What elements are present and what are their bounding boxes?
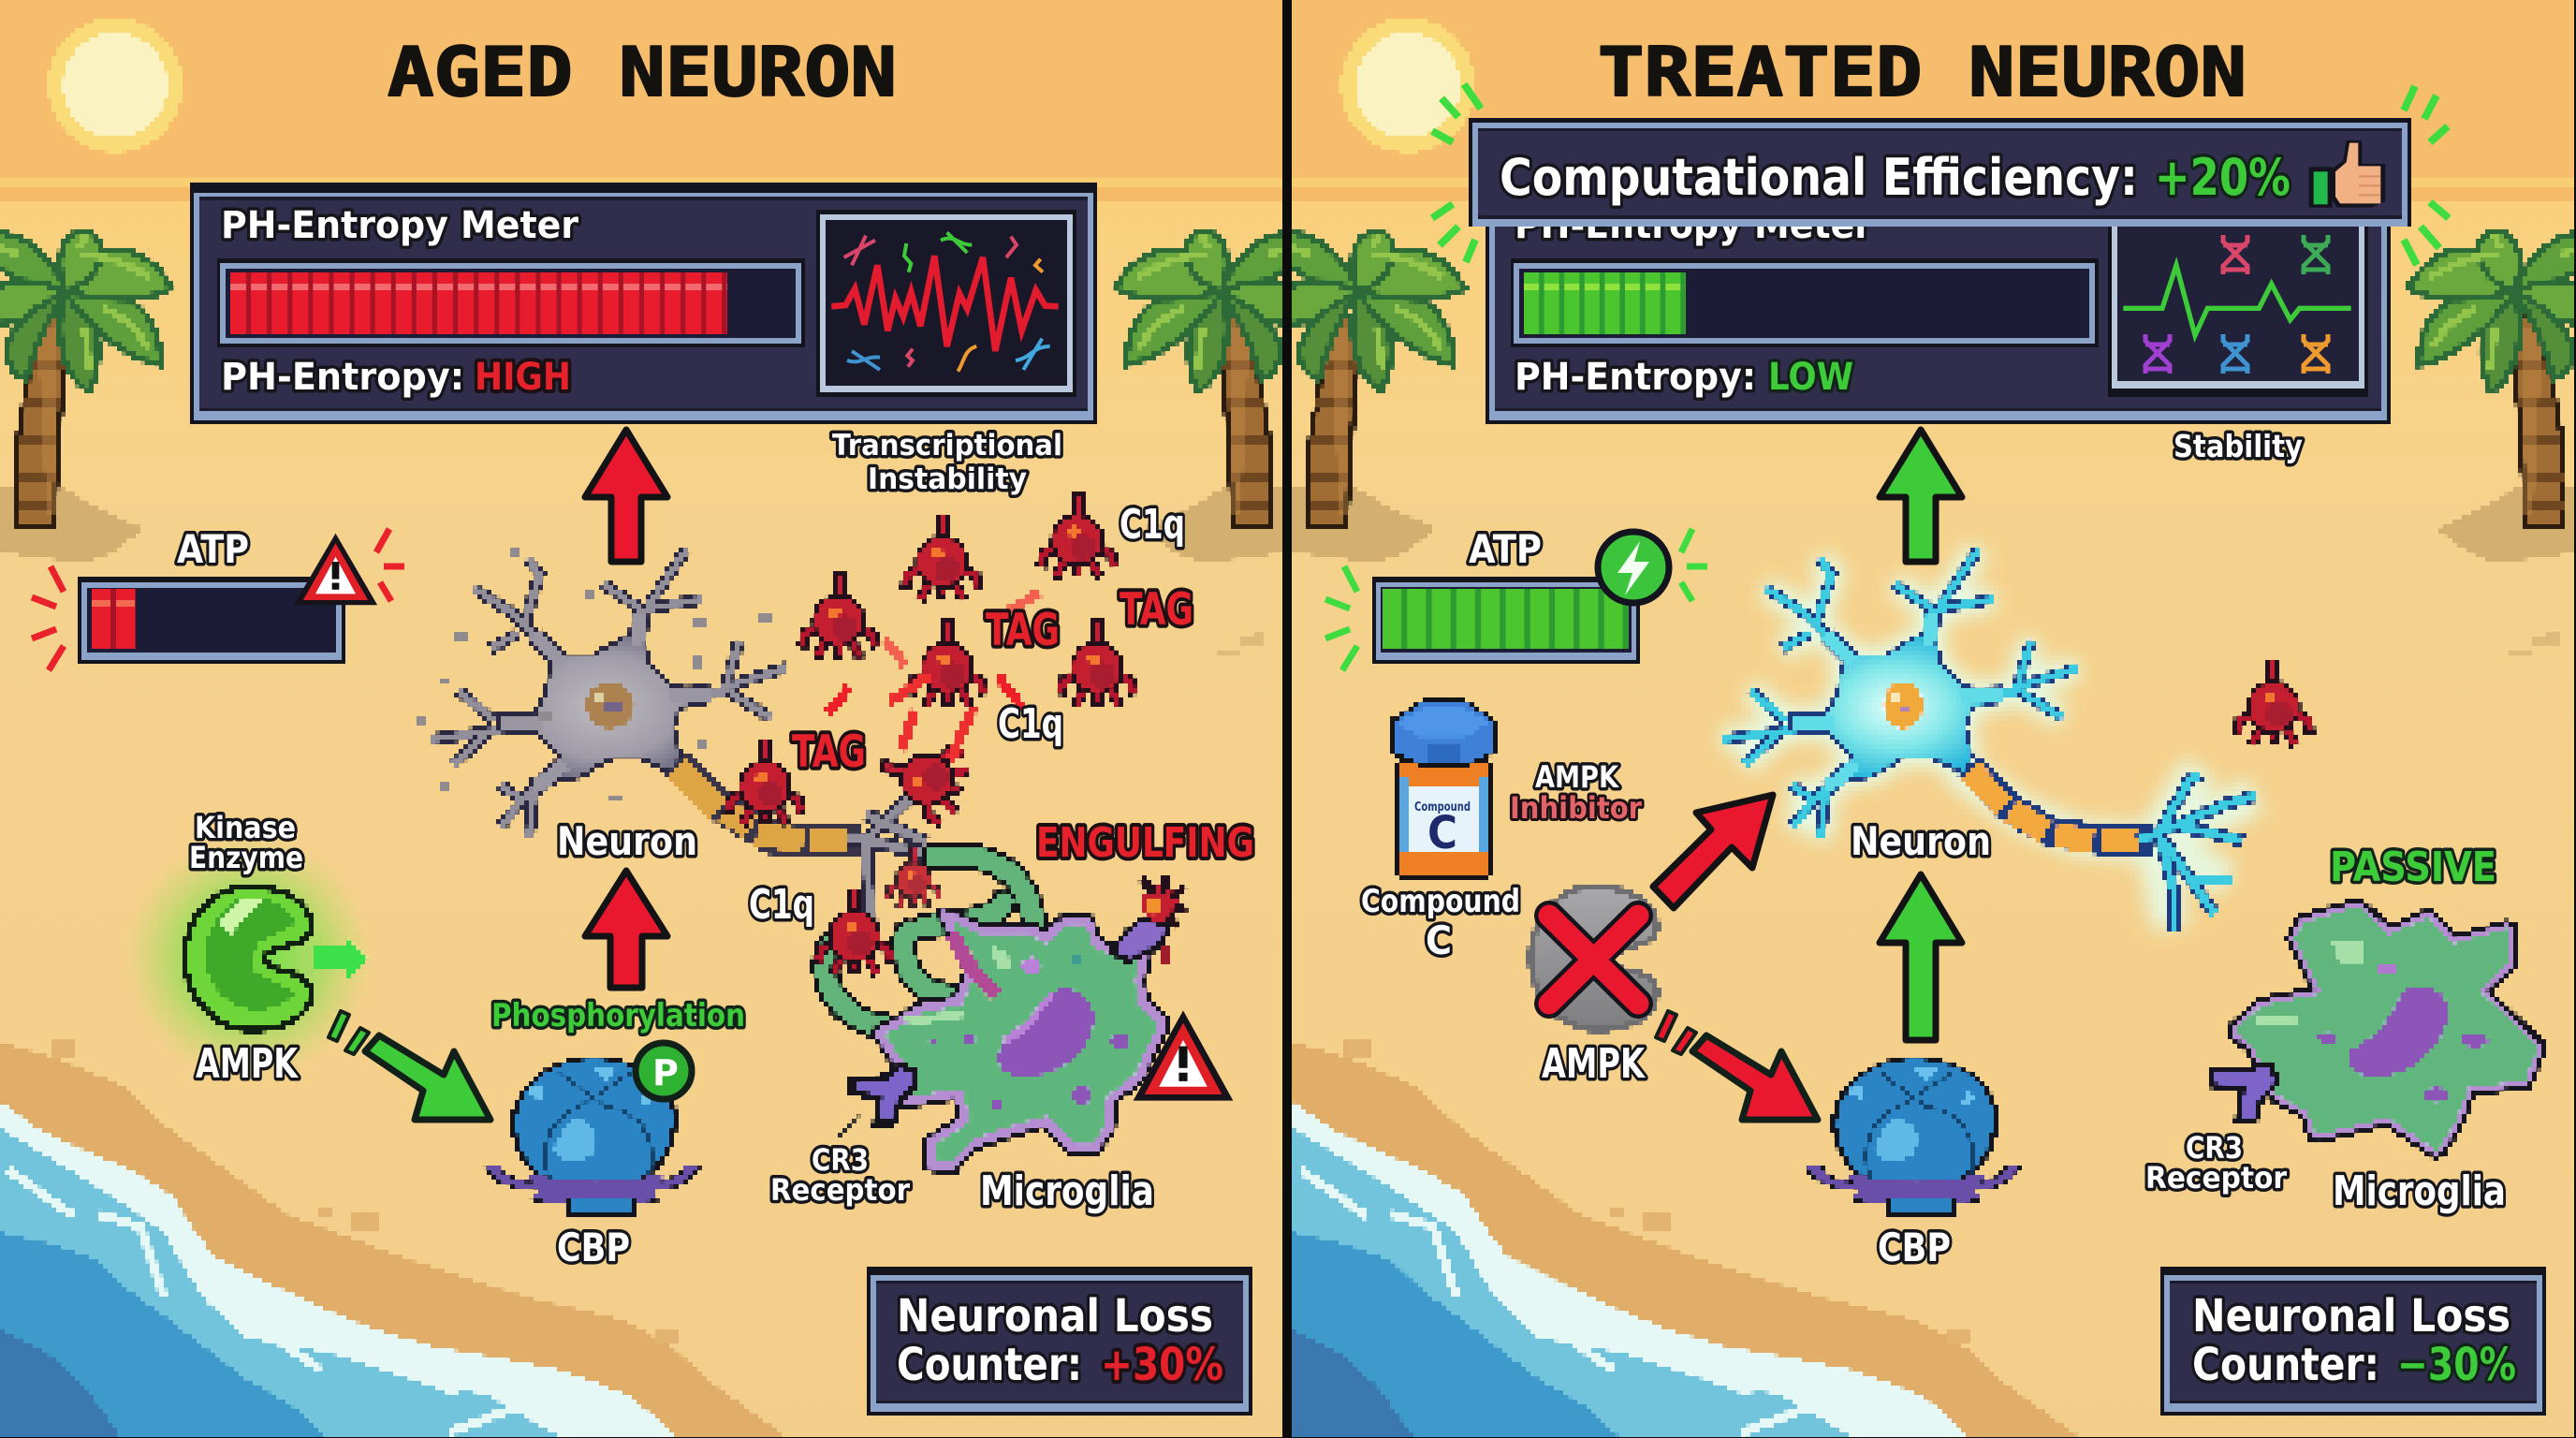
- icon: phosphate badge: P: [652, 1052, 679, 1093]
- label: passive: PASSIVE: [2330, 844, 2496, 891]
- labels: treated side: [1361, 428, 2506, 1270]
- text: entropy status: PH-Entropy:: [1515, 356, 1756, 399]
- icon: red motion dashes between C1q proteins: [827, 593, 1039, 760]
- label: compound C: C: [1426, 917, 1452, 963]
- label: C1q lower: C1q: [749, 881, 814, 929]
- label: microglia: Microglia: [2333, 1167, 2506, 1215]
- text: counter value: +30%: [1101, 1339, 1223, 1391]
- label: kinase enzyme: Enzyme: [189, 840, 303, 875]
- icon: phosphate badge: [636, 1043, 692, 1099]
- arrow: CBP to neuron, treated: [1880, 874, 1962, 1040]
- text: high value: HIGH: [475, 356, 571, 399]
- icon: ATP warning triangle: [294, 534, 377, 605]
- label: CR3 receptor: CR3: [2186, 1130, 2243, 1166]
- arrow: AMPK blocked toward neuron: [1653, 795, 1773, 908]
- panel: PH-entropy meter, treated: [1486, 183, 2391, 424]
- neuron: treated glowing cyan neuron: [1722, 550, 2256, 933]
- label: CR3 receptor: Receptor: [2145, 1160, 2287, 1196]
- label: CR3 receptor: [770, 1142, 910, 1208]
- label: AMPK inhibitor: AMPK: [1535, 759, 1619, 795]
- panel: ATP bar, full: [1372, 577, 1640, 664]
- text: counter label line 2: Counter:: [2192, 1339, 2379, 1391]
- text: efficiency value: +20%: [2155, 148, 2291, 207]
- icon: energy bolt badge: [1598, 532, 1669, 603]
- text: counter label line 1: Neuronal Loss: [897, 1290, 1213, 1343]
- meter bar: high entropy: [217, 258, 805, 347]
- text: counter label line 1: Neuronal Loss: [2192, 1290, 2510, 1343]
- text: efficiency label: Computational Efficiency:: [1500, 148, 2138, 207]
- label: AMPK: AMPK: [1542, 1040, 1646, 1088]
- label: pill bottle text: [1414, 800, 1471, 859]
- panel: computational efficiency banner: [1469, 118, 2411, 227]
- icon: inhibited grey AMPK: [1530, 887, 1657, 1030]
- label: engulfing: ENGULFING: [1036, 819, 1254, 867]
- neuron: aged grey neuron: [417, 548, 955, 927]
- label: transcriptional instability: Transcriptional: [832, 429, 1062, 462]
- panel: ATP bar, depleted: [78, 577, 345, 664]
- panel: PH-entropy meter, aged: [190, 183, 1097, 424]
- heading: treated neuron title: TREATED NEURON: [1598, 33, 2247, 111]
- label: TAG middle: TAG: [986, 605, 1060, 656]
- arrow: CBP to neuron, aged: [585, 871, 667, 988]
- label: CBP: CBP: [557, 1225, 630, 1270]
- text: clipped meter heading: PH-Entropy Meter: [1515, 204, 1872, 247]
- label: CBP: CBP: [1878, 1225, 1951, 1270]
- icon: green energy sparks: [1325, 529, 1707, 670]
- neuron: microglia cell engulfing, aged: [826, 856, 1170, 1167]
- panel: neuronal loss counter, aged: [867, 1267, 1252, 1416]
- arrow: AMPK to CBP phosphorylation: [329, 1011, 490, 1120]
- label: C1q top: C1q: [1120, 501, 1185, 549]
- label: AMPK inhibitor: Inhibitor: [1510, 790, 1642, 826]
- label: ATP: ATP: [1469, 526, 1542, 572]
- label: kinase enzyme: [189, 810, 303, 875]
- label: CR3 receptor: Receptor: [770, 1172, 910, 1208]
- label: neuron: Neuron: [557, 818, 697, 864]
- text: meter heading: PH-Entropy Meter: [221, 204, 578, 247]
- chart: unstable transcription monitor: [816, 210, 1076, 397]
- icon: red alarm sparks: [32, 529, 404, 670]
- arrow: neuron to PH-entropy, treated: [1880, 430, 1962, 562]
- label: TAG left: TAG: [792, 726, 866, 778]
- label: compound C: [1361, 883, 1520, 963]
- label: transcriptional instability: Instability: [868, 462, 1027, 496]
- label: kinase enzyme: Kinase: [195, 810, 296, 845]
- label: ATP: ATP: [177, 526, 249, 572]
- neuron: passive microglia, treated side: [2212, 910, 2535, 1148]
- meter bar: low entropy: [1511, 258, 2099, 347]
- label: neuron: Neuron: [1851, 818, 1991, 864]
- icon: CBP protein, treated side: [1814, 1058, 2012, 1215]
- arrow: neuron to PH-entropy, aged: [585, 430, 667, 562]
- chart: stable transcription monitor: [2108, 210, 2368, 397]
- icon: C1q complement proteins: [729, 492, 1193, 970]
- text: low value: LOW: [1768, 356, 1853, 399]
- label: AMPK: AMPK: [196, 1040, 299, 1088]
- panel: neuronal loss counter, treated: [2160, 1267, 2546, 1416]
- label: pill bottle text: C: [1427, 807, 1457, 859]
- icon: thumbs up: [2309, 140, 2385, 208]
- text: counter label line 2: Counter:: [897, 1339, 1082, 1391]
- label: compound C: Compound: [1361, 883, 1520, 920]
- label: AMPK inhibitor: [1510, 759, 1642, 826]
- icon: CBP protein, aged side: [493, 1058, 692, 1215]
- label: pill bottle text: Compound: [1414, 800, 1471, 814]
- label: CR3 receptor: CR3: [812, 1142, 869, 1178]
- heading: aged neuron title: AGED NEURON: [388, 33, 897, 111]
- labels: aged side: [177, 429, 1254, 1270]
- label: phosphorylation: Phosphorylation: [491, 997, 745, 1034]
- label: C1q middle: C1q: [998, 700, 1063, 748]
- icon: green sparkles around banner: [1432, 84, 2449, 265]
- icon: Compound C pill bottle: [1390, 699, 1496, 878]
- icon: lone C1q protein, treated side: [2238, 658, 2309, 741]
- label: stability: Stability: [2174, 428, 2303, 464]
- label: transcriptional instability: [832, 429, 1062, 496]
- icon: microglia warning triangle: [1134, 1010, 1233, 1101]
- arrow: AMPK blocked toward CBP: [1656, 1011, 1818, 1120]
- label: TAG right: TAG: [1120, 584, 1193, 636]
- icon: red X over AMPK: [1549, 916, 1638, 1004]
- text: entropy status: PH-Entropy:: [221, 356, 464, 399]
- label: CR3 receptor: [2145, 1130, 2287, 1196]
- label: microglia: Microglia: [980, 1167, 1154, 1215]
- text: counter value: −30%: [2397, 1339, 2516, 1391]
- icon: AMPK kinase enzyme with glow: [124, 834, 372, 1081]
